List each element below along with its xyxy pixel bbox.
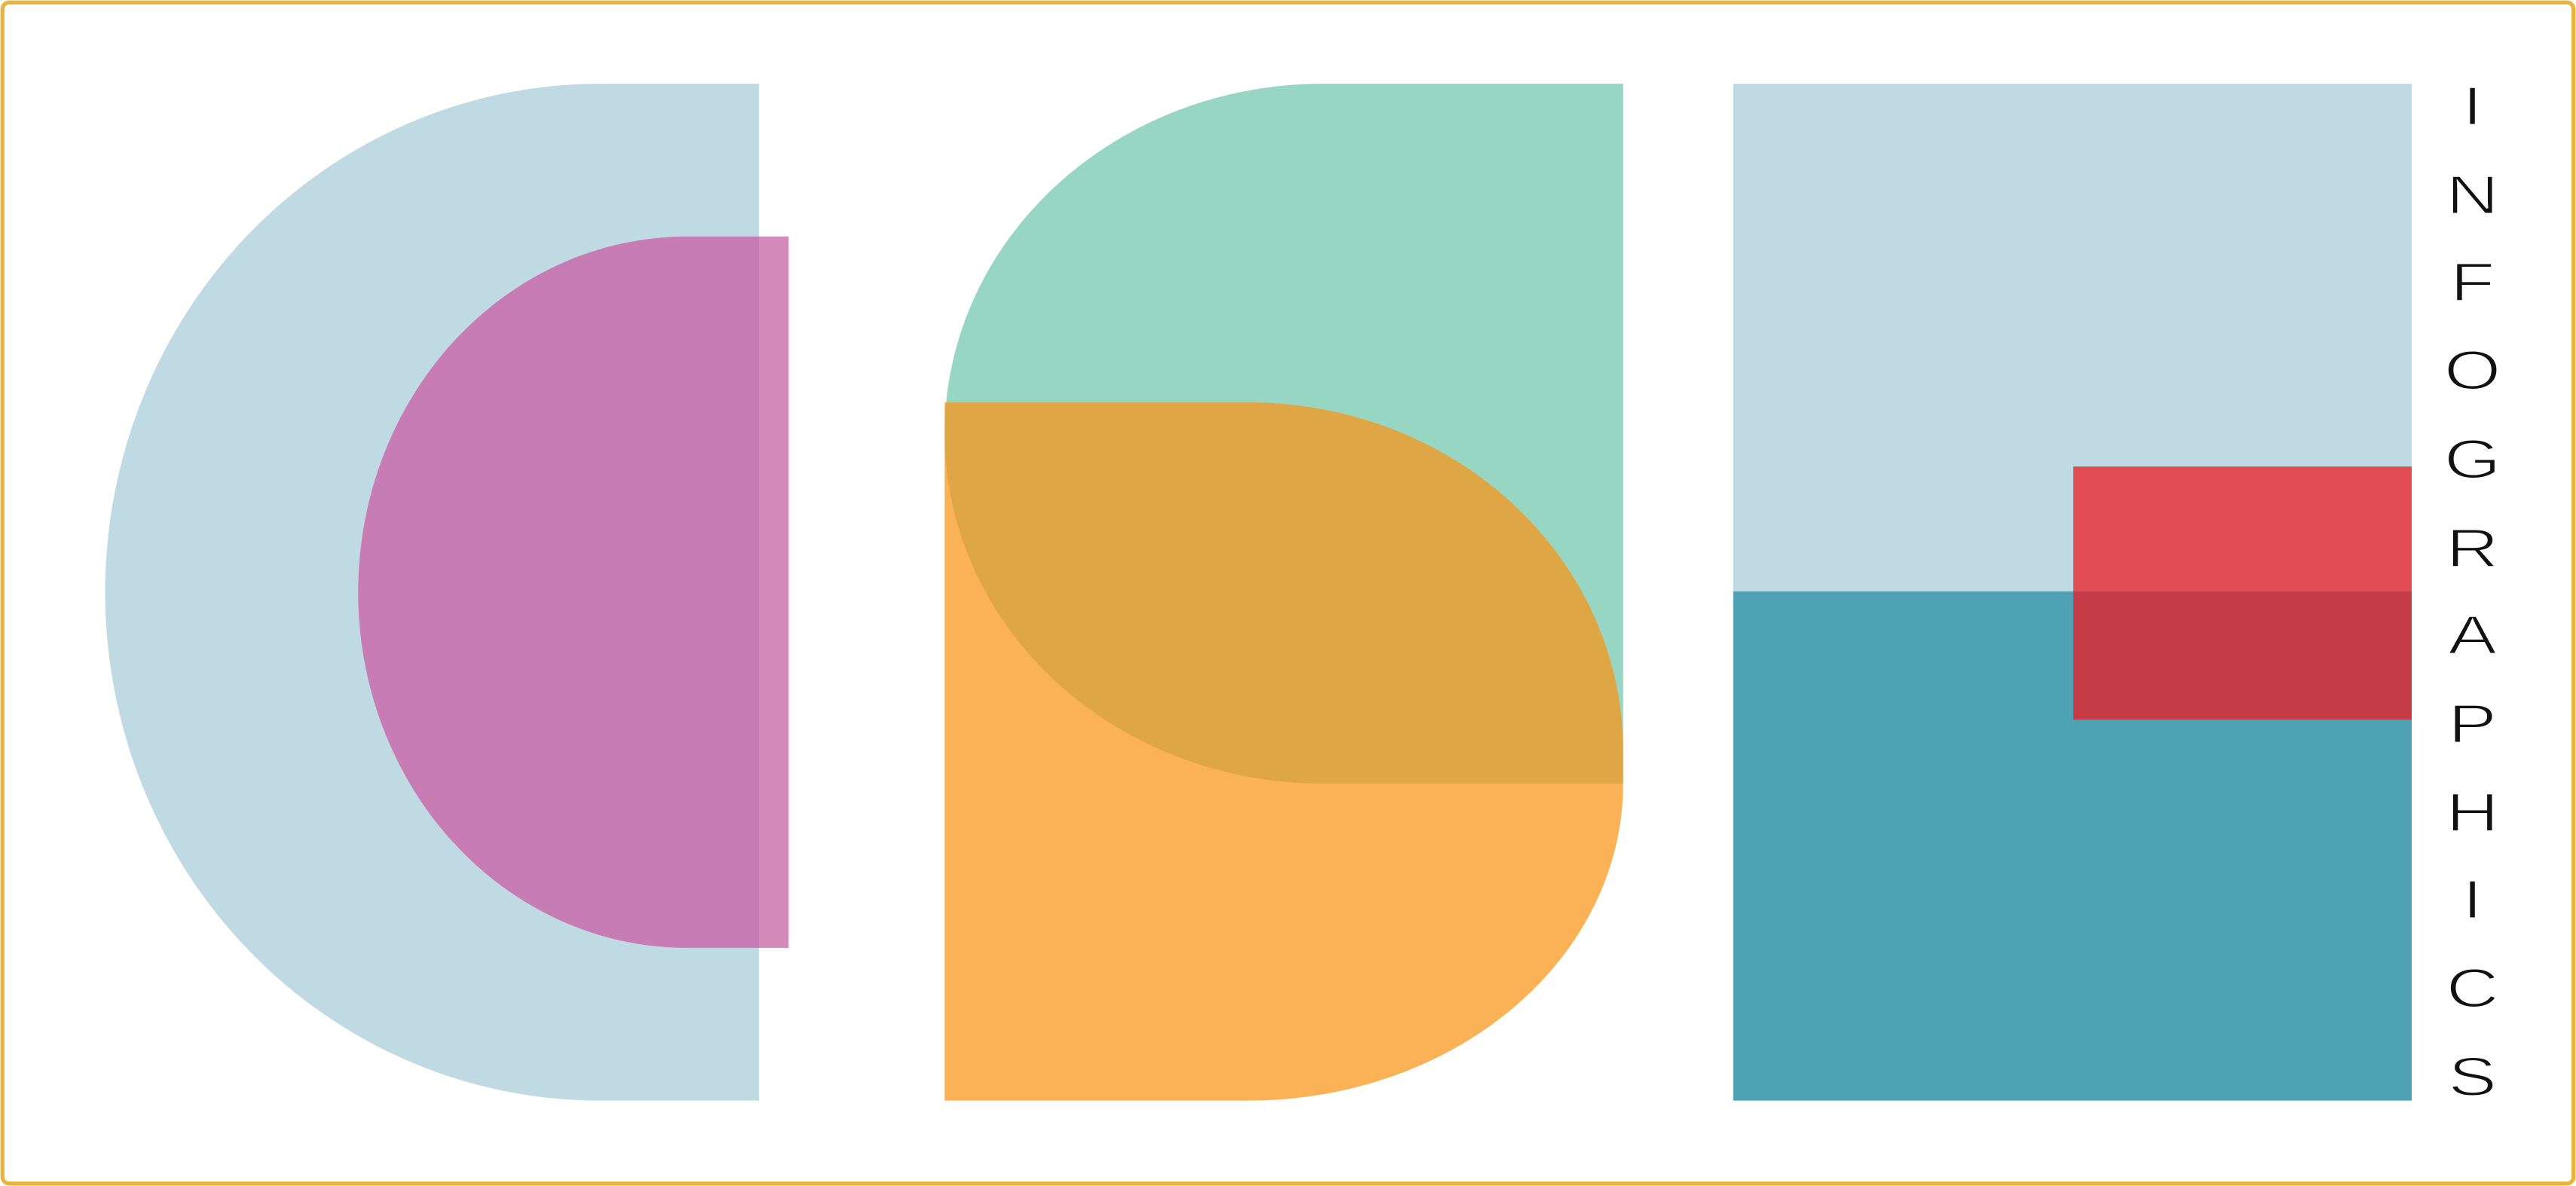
shape: light blue half ellipse: [106, 84, 759, 1101]
shape: overlap: [945, 402, 1623, 784]
vertical title INFOGRAPHICS: F: [2450, 252, 2495, 313]
vertical title INFOGRAPHICS: G: [2444, 429, 2501, 490]
shape: teal square bottom: [1733, 591, 2412, 1101]
shape: red block: [2073, 466, 2412, 720]
vertical title INFOGRAPHICS: H: [2446, 783, 2499, 843]
vertical title INFOGRAPHICS: I: [2462, 77, 2483, 137]
vertical title INFOGRAPHICS: [2444, 77, 2501, 1108]
shape: light blue square top: [1733, 84, 2412, 591]
vertical title INFOGRAPHICS: A: [2448, 606, 2497, 666]
vertical title INFOGRAPHICS: N: [2446, 165, 2499, 225]
vertical title INFOGRAPHICS: O: [2444, 341, 2501, 402]
shape: magenta half ellipse: [358, 237, 788, 948]
shape: orange leaf: [944, 402, 1623, 1101]
vertical title INFOGRAPHICS: R: [2446, 518, 2499, 579]
vertical title INFOGRAPHICS: S: [2448, 1047, 2497, 1108]
vertical title INFOGRAPHICS: I: [2462, 870, 2483, 931]
vertical title INFOGRAPHICS: P: [2448, 694, 2497, 754]
shape: green leaf: [944, 84, 1623, 784]
vertical title INFOGRAPHICS: C: [2446, 958, 2499, 1019]
